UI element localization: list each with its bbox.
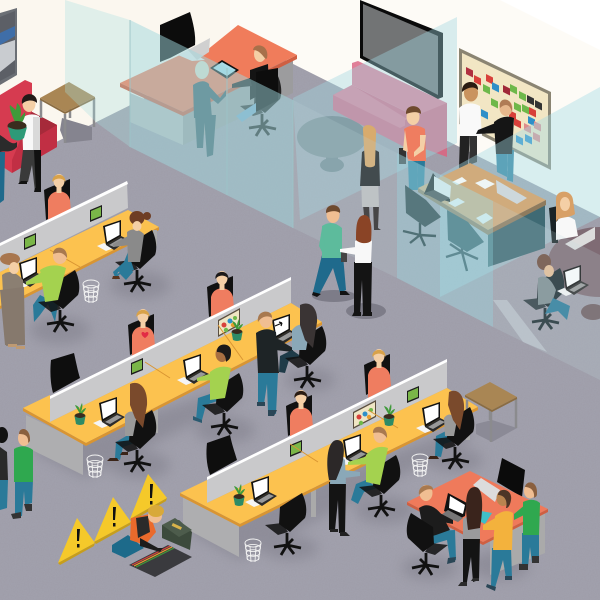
room desk base bbox=[130, 60, 293, 145]
papers and laptops on meeting table bbox=[424, 173, 527, 224]
room chair behind desk bbox=[160, 12, 195, 62]
glass front wall, room one bbox=[130, 20, 293, 228]
back wall bbox=[0, 0, 600, 300]
sofa, pink bbox=[333, 61, 447, 157]
laptop, desk B middle bbox=[177, 354, 209, 385]
warning triangle, front bbox=[58, 518, 95, 565]
person: man in green sweater bbox=[514, 482, 540, 570]
desk row C bbox=[180, 388, 478, 527]
desk row B bbox=[23, 303, 322, 446]
desk base row B bbox=[26, 323, 319, 475]
teal paper on orange table bbox=[481, 511, 492, 524]
floor shadows bbox=[30, 271, 530, 580]
person: woman with auburn hair in white shirt bbox=[340, 215, 386, 319]
person: man in white holding plant bbox=[18, 94, 41, 192]
laptop, desk A bbox=[97, 220, 129, 251]
chair at meeting table, front bbox=[446, 210, 484, 271]
bin, row C right bbox=[412, 454, 428, 477]
person: woman with bun seated, right bbox=[523, 254, 570, 330]
person: woman with long hair at desk B bbox=[107, 383, 156, 472]
person: woman in long khaki dress bbox=[0, 253, 25, 349]
laptop, desk C middle bbox=[337, 434, 369, 465]
side table, upper left bbox=[40, 82, 95, 143]
plant, desk C right bbox=[384, 404, 395, 426]
silver laptop on orange table bbox=[473, 478, 500, 502]
green card on partition C right bbox=[407, 386, 419, 403]
glass base reflection bbox=[493, 300, 547, 352]
person behind desk row B, black hair bbox=[207, 271, 234, 320]
meeting chair behind orange table bbox=[497, 458, 525, 497]
toolbox bbox=[162, 518, 192, 550]
person: seated woman with black hair bbox=[279, 304, 326, 388]
meeting table bbox=[418, 163, 546, 235]
glass front wall, right bbox=[493, 201, 600, 380]
framed wall photo bbox=[0, 8, 17, 85]
laptop, desk C left bbox=[245, 476, 277, 507]
person: woman with long hair at desk C bbox=[428, 391, 474, 469]
empty chair behind partition B bbox=[50, 353, 80, 393]
partition, desk row C bbox=[207, 359, 447, 503]
laptop, desk B right with arrow bbox=[266, 314, 298, 345]
person: man in yellow sweater bbox=[483, 490, 513, 591]
person: man in lime shirt at desk C bbox=[348, 427, 400, 517]
person: standing man in room bbox=[193, 61, 226, 157]
person: visitor at left edge bbox=[0, 135, 17, 203]
person: man in white shirt at board bbox=[459, 82, 482, 168]
plant, desk B right bbox=[232, 319, 243, 341]
person: standing man in black bbox=[256, 312, 293, 416]
person: woman in grey with long hair bbox=[458, 487, 482, 586]
person: man in dark sweater at board bbox=[476, 99, 514, 182]
person: blonde woman in skirt bbox=[360, 125, 381, 230]
plant, desk B bbox=[74, 403, 86, 425]
glass partition, room two bbox=[293, 17, 457, 220]
person behind desk row C, tan hair bbox=[364, 349, 391, 398]
side table, right bbox=[465, 382, 517, 442]
glass frames bbox=[130, 20, 293, 228]
warning triangle, back bbox=[130, 474, 167, 521]
floor hatch with cables bbox=[129, 545, 192, 577]
glass partition, right bbox=[440, 87, 600, 297]
empty chair, desk C bbox=[265, 493, 306, 555]
partition, desk row A bbox=[0, 181, 128, 272]
orange table legs bbox=[490, 513, 545, 575]
laptop, desk C right bbox=[416, 402, 448, 433]
round table, right bbox=[548, 227, 600, 320]
person: man in coral shirt with folder bbox=[399, 106, 426, 190]
meeting table base bbox=[488, 203, 545, 267]
person behind desk row B, heart shirt bbox=[128, 309, 155, 358]
glass front wall, room two bbox=[293, 100, 397, 278]
person: man in green shirt walking bbox=[312, 205, 356, 302]
orange table top bbox=[407, 471, 548, 545]
white ceiling area bbox=[500, 0, 600, 50]
laptop, desk A left bbox=[13, 257, 45, 288]
plant held by man bbox=[8, 103, 27, 140]
person: woman with bun at desk A bbox=[112, 211, 156, 292]
tablet on room desk bbox=[210, 60, 239, 79]
laptop on round table bbox=[557, 265, 589, 296]
bin, row C left bbox=[245, 539, 261, 562]
person: blonde woman seated, right bbox=[549, 192, 578, 243]
green card on partition C left bbox=[290, 440, 302, 457]
bin, row B bbox=[87, 455, 103, 478]
person: man at left edge bbox=[0, 427, 8, 510]
laptop, desk B left bbox=[93, 397, 125, 428]
person: seated man in room bbox=[232, 45, 281, 136]
plant, desk C bbox=[234, 484, 245, 506]
room desk top bbox=[120, 25, 297, 116]
person behind desk row C, dark hair bbox=[286, 390, 313, 439]
wall TV bbox=[360, 0, 443, 99]
empty chair behind partition C bbox=[206, 435, 237, 475]
glass side wall, room one bbox=[65, 0, 130, 147]
person: man in lime shirt at desk A bbox=[26, 248, 79, 332]
silver laptop on room desk bbox=[178, 38, 210, 61]
person: man in lime shirt at desk B bbox=[193, 344, 243, 435]
desk base row C bbox=[183, 410, 470, 557]
laptop on orange table bbox=[441, 493, 467, 522]
green card on partition B bbox=[131, 358, 143, 375]
green cards on partition A bbox=[24, 205, 102, 250]
poster on partition B bbox=[218, 308, 240, 337]
glass panel, centre bbox=[397, 153, 493, 327]
desk row A bbox=[0, 210, 159, 309]
project board with sticky notes bbox=[459, 48, 551, 170]
person: seated man in black bbox=[407, 485, 456, 575]
person: standing woman with black hair bbox=[327, 440, 360, 536]
partition, desk row B bbox=[50, 277, 291, 422]
bin, row A bbox=[83, 280, 99, 303]
round meeting table bbox=[297, 116, 367, 172]
worker repairing floor bbox=[112, 505, 164, 558]
poster on partition C bbox=[353, 400, 376, 429]
warning triangle, middle bbox=[94, 497, 131, 544]
chair at meeting table, left bbox=[403, 185, 441, 246]
panel: red sofa bbox=[0, 80, 57, 173]
person behind desk row A bbox=[44, 174, 71, 223]
silver laptop on round table bbox=[565, 227, 595, 250]
person: man in green sweater, left bbox=[11, 429, 33, 519]
right wall section bbox=[230, 0, 600, 230]
